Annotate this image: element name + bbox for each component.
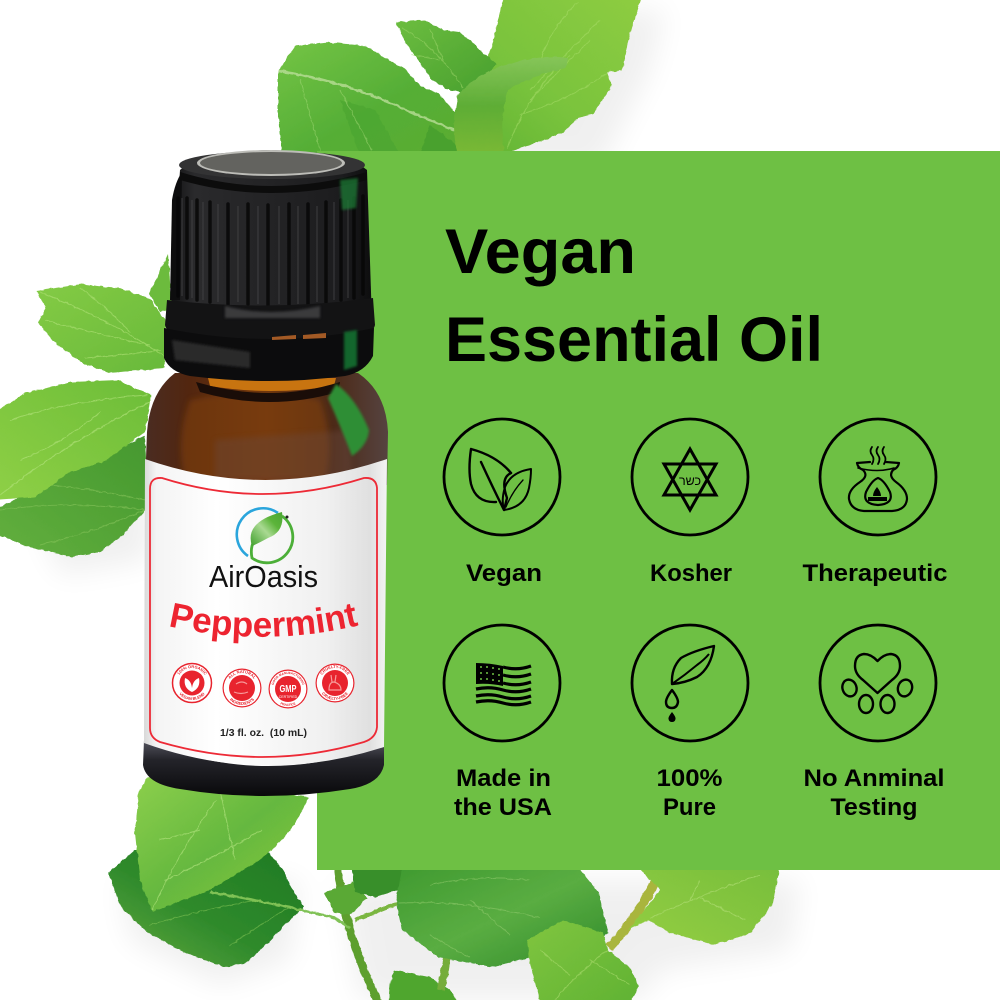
stem: right branch — [355, 903, 398, 920]
label: vegan: Vegan — [466, 560, 542, 587]
certification badges — [172, 662, 354, 708]
product name: Peppermint — [170, 603, 358, 644]
mint leaves: left sprig — [0, 254, 172, 557]
leaf: front left bright — [135, 777, 309, 912]
badge: vegan: 100% ORGANIC — [177, 665, 207, 675]
heading — [445, 217, 823, 375]
badge: gmp: PRACTICE — [280, 702, 296, 706]
bottle cap — [164, 150, 375, 381]
icon: paw with heart — [820, 625, 936, 741]
cap green reflection — [340, 178, 358, 210]
label: no anminal testing: Testing — [830, 794, 918, 821]
label: kosher: Kosher — [650, 560, 732, 587]
leaf: top middle small — [396, 20, 497, 93]
badge: all natural: ALL NATURAL — [228, 670, 256, 679]
badge: gmp: CERTIFIED — [279, 695, 298, 699]
label red border — [150, 478, 377, 757]
cap upper ring — [165, 298, 375, 340]
brand name: AirOasis — [209, 559, 318, 594]
leaf: behind centre top — [351, 868, 420, 897]
feature: made in the usa — [444, 625, 560, 821]
brand logo — [237, 508, 293, 563]
label: made in the usa: the USA — [454, 794, 552, 821]
icon: us flag — [444, 625, 560, 741]
leaf: bottom small centre — [389, 970, 461, 1000]
feature: therapeutic — [802, 419, 948, 587]
icon: star of david — [632, 419, 748, 535]
label: no anminal testing — [804, 765, 944, 821]
label: made in the usa — [454, 765, 552, 821]
badge: cruelty free — [316, 664, 354, 702]
soft leaf shadows — [30, 10, 800, 1000]
bottle glass — [145, 373, 388, 485]
feature: kosher — [632, 419, 748, 587]
leaf bud over top sprig — [454, 57, 568, 155]
icon: aroma lamp — [820, 419, 936, 535]
label: made in the usa: Made in — [456, 765, 551, 792]
cap ribs — [178, 196, 363, 305]
badge: cruelty free: CRUELTY-FREE — [320, 665, 350, 675]
leaf: upper left sliver — [149, 254, 172, 312]
icon: star of david: כשר — [679, 474, 701, 488]
badge: all natural — [222, 668, 262, 708]
leaf: front bottom — [527, 920, 639, 1000]
green panel — [317, 151, 1000, 870]
label: 100% pure: 100% — [656, 765, 722, 792]
stem: small centre — [441, 958, 447, 990]
feature: vegan — [444, 419, 560, 587]
leaf: top right large — [459, 0, 644, 152]
badge: vegan: VEGAN BLEND — [180, 692, 204, 700]
stem: main — [335, 800, 380, 1000]
bottle — [143, 150, 388, 796]
leaf: upper left — [36, 284, 166, 373]
feature: no animal testing — [804, 625, 944, 821]
badge: gmp — [268, 670, 308, 708]
icon: vegan leaves — [444, 419, 560, 535]
badge: gmp: GOOD MANUFACTURING — [272, 672, 304, 685]
badge: gmp: GMP — [280, 684, 297, 695]
leaf: centre — [396, 866, 608, 967]
mint leaves: top sprig — [278, 0, 644, 155]
label: therapeutic: Therapeutic — [802, 560, 948, 587]
leaf: lower dark — [0, 436, 148, 557]
heading: Vegan — [445, 217, 636, 287]
stem: right yellow — [609, 866, 663, 948]
leaf: top left large — [278, 42, 480, 155]
leaf: bud by stem — [324, 882, 367, 915]
label: 100% pure: Pure — [663, 794, 716, 821]
mint leaves: bottom sprig — [108, 777, 780, 1000]
product label — [144, 459, 387, 765]
bottle base — [143, 740, 384, 796]
volume text: 1/3 fl. oz. (10 mL) — [220, 727, 307, 739]
leaf: middle left bright — [0, 380, 151, 500]
icon: leaf and drops — [632, 625, 748, 741]
heading: Essential Oil — [445, 305, 823, 375]
leaf: bottom left dark — [108, 850, 350, 967]
feature: 100% pure — [632, 625, 748, 821]
badge: vegan — [172, 662, 212, 704]
label: no anminal testing: No Anminal — [804, 765, 944, 792]
leaf: right — [628, 866, 780, 945]
badge: all natural: INGREDIENTS — [230, 698, 254, 705]
badge: cruelty free: CRUELTY-FREE — [322, 692, 348, 700]
cap lower ring — [164, 328, 374, 381]
label: 100% pure — [656, 765, 722, 821]
